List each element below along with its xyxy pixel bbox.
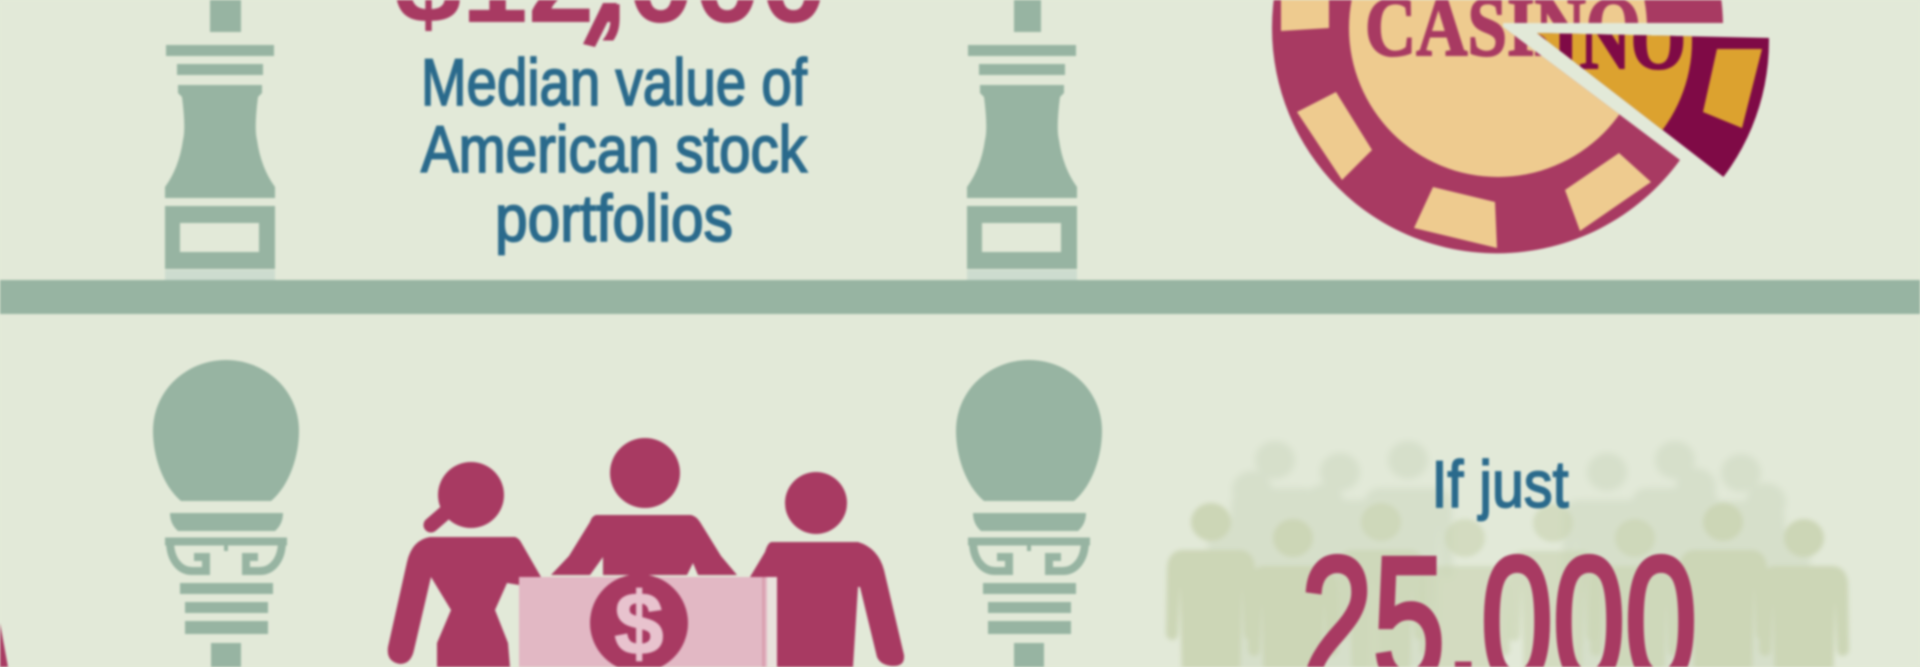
chip slice — [1536, 32, 1771, 178]
icon: three people holding a dollar bill — [388, 438, 904, 667]
left column, upper section — [165, 0, 275, 280]
corner fragment — [0, 623, 8, 667]
stock value caption: Median value of — [421, 45, 808, 119]
crowd silhouette — [1166, 441, 1849, 667]
stock value caption: portfolios — [495, 181, 733, 255]
front row — [1166, 503, 1849, 667]
man, right — [750, 472, 904, 667]
right column, lower capital — [956, 360, 1102, 667]
left column, lower capital — [153, 360, 299, 667]
man, centre — [551, 438, 737, 575]
crowd lead-in text: If just — [1432, 447, 1568, 521]
stock value caption: American stock — [421, 112, 808, 186]
chip body — [1272, 0, 1724, 254]
right column, upper section — [967, 0, 1077, 280]
dollar bill — [519, 574, 777, 667]
slice block — [1703, 49, 1762, 128]
stock value caption — [421, 45, 808, 255]
icon: casino chip with slice removed — [1272, 0, 1769, 267]
divider band — [0, 280, 1920, 314]
back row — [1207, 441, 1811, 667]
woman — [388, 462, 541, 667]
